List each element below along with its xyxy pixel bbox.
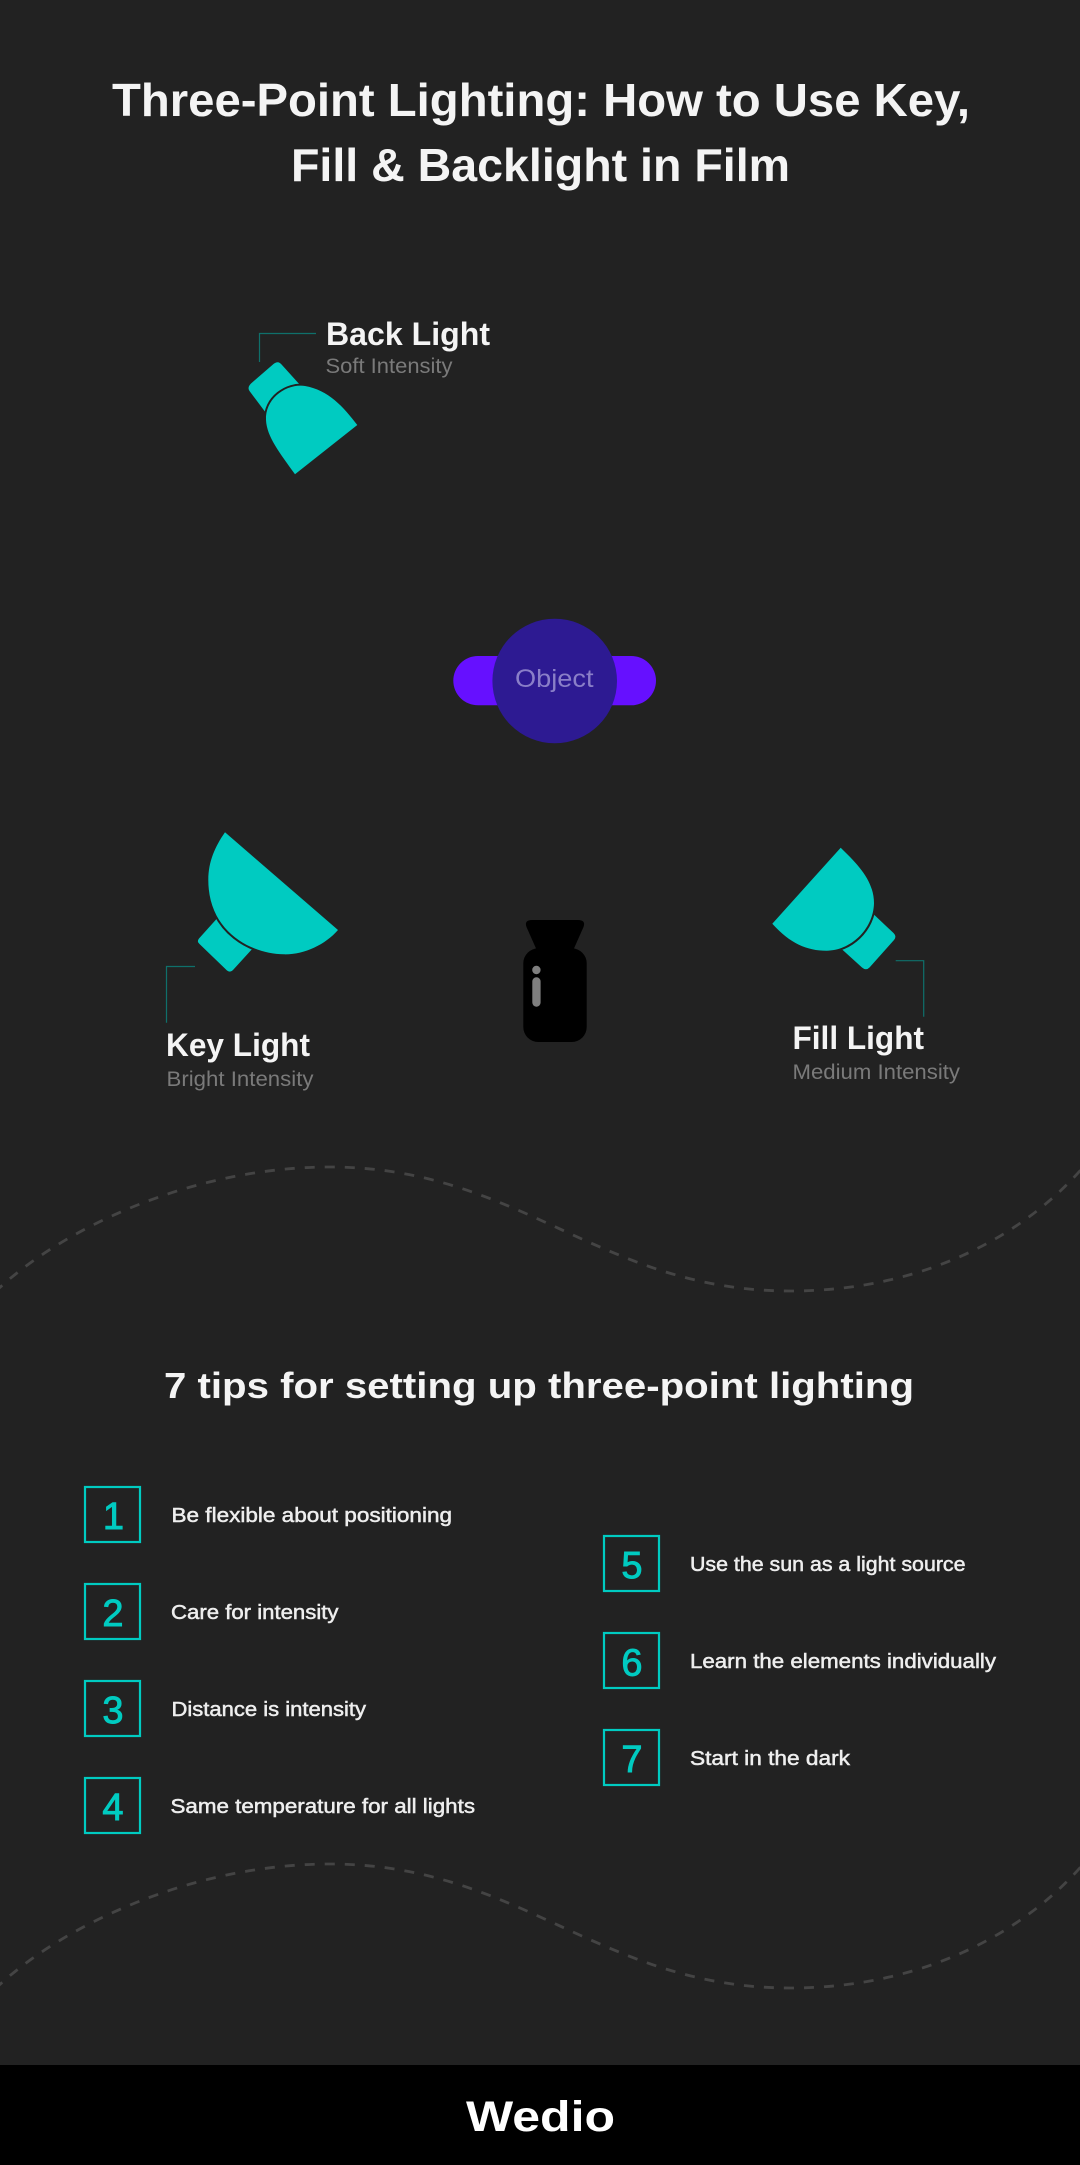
- tip 2: 2: [102, 1593, 124, 1635]
- tip 7: [604, 1730, 851, 1785]
- icon: fill light lamp: [772, 848, 895, 969]
- footer logo: Wedio: [466, 2093, 615, 2141]
- connector line: key light: [166, 966, 195, 1023]
- title: [112, 74, 970, 191]
- back light: [249, 316, 490, 474]
- tip 7: Start in the dark: [690, 1748, 851, 1770]
- dashed wave: lower: [0, 1862, 1080, 1989]
- tip 5: Use the sun as a light source: [690, 1554, 966, 1576]
- label: key light: Key Light: [166, 1027, 310, 1063]
- label: back light: [326, 316, 490, 378]
- tip 1: Be flexible about positioning: [172, 1505, 452, 1527]
- label: back light: Back Light: [326, 316, 490, 352]
- tip 7: 7: [621, 1739, 643, 1781]
- dashed wave: upper: [0, 1165, 1080, 1292]
- tip 4: [85, 1778, 475, 1833]
- label: key light: Bright Intensity: [166, 1068, 314, 1091]
- tip 1: 1: [103, 1496, 124, 1538]
- tip 4: Same temperature for all lights: [170, 1796, 475, 1818]
- tip 5: [604, 1536, 966, 1591]
- title: Three-Point Lighting: How to Use Key,: [112, 74, 970, 126]
- object pill: [453, 656, 656, 705]
- tip 2: Care for intensity: [171, 1602, 338, 1624]
- panel: three-point lighting diagram: [166, 316, 961, 1091]
- object circle: [492, 619, 617, 743]
- tip 4: 4: [102, 1787, 124, 1829]
- icon: key light lamp: [198, 832, 338, 972]
- key light: [166, 832, 338, 1091]
- icon: camera: [523, 920, 587, 1042]
- icon: back light lamp: [249, 362, 357, 474]
- footer band: [0, 2065, 1080, 2165]
- object label: Object: [515, 665, 594, 693]
- label: back light: Soft Intensity: [326, 355, 453, 378]
- tip 5: 5: [621, 1545, 643, 1587]
- tip 3: [85, 1681, 366, 1736]
- label: key light: [166, 1027, 314, 1091]
- panel: tips list: [85, 1487, 996, 1833]
- connector line: back light: [260, 334, 316, 362]
- object: [453, 619, 656, 743]
- label: fill light: [792, 1020, 961, 1084]
- label: fill light: Medium Intensity: [792, 1061, 961, 1084]
- tip 6: 6: [621, 1642, 643, 1684]
- tip 1: [85, 1487, 452, 1542]
- tip 6: [604, 1633, 996, 1688]
- connector line: fill light: [896, 961, 924, 1017]
- tip 6: Learn the elements individually: [690, 1651, 996, 1673]
- fill light: [772, 848, 961, 1084]
- tip 2: [85, 1584, 338, 1639]
- label: fill light: Fill Light: [792, 1020, 924, 1056]
- tip 3: 3: [102, 1690, 124, 1732]
- tips heading: 7 tips for setting up three-point lighting: [164, 1365, 914, 1406]
- title: Fill & Backlight in Film: [291, 139, 790, 191]
- tip 3: Distance is intensity: [172, 1699, 366, 1721]
